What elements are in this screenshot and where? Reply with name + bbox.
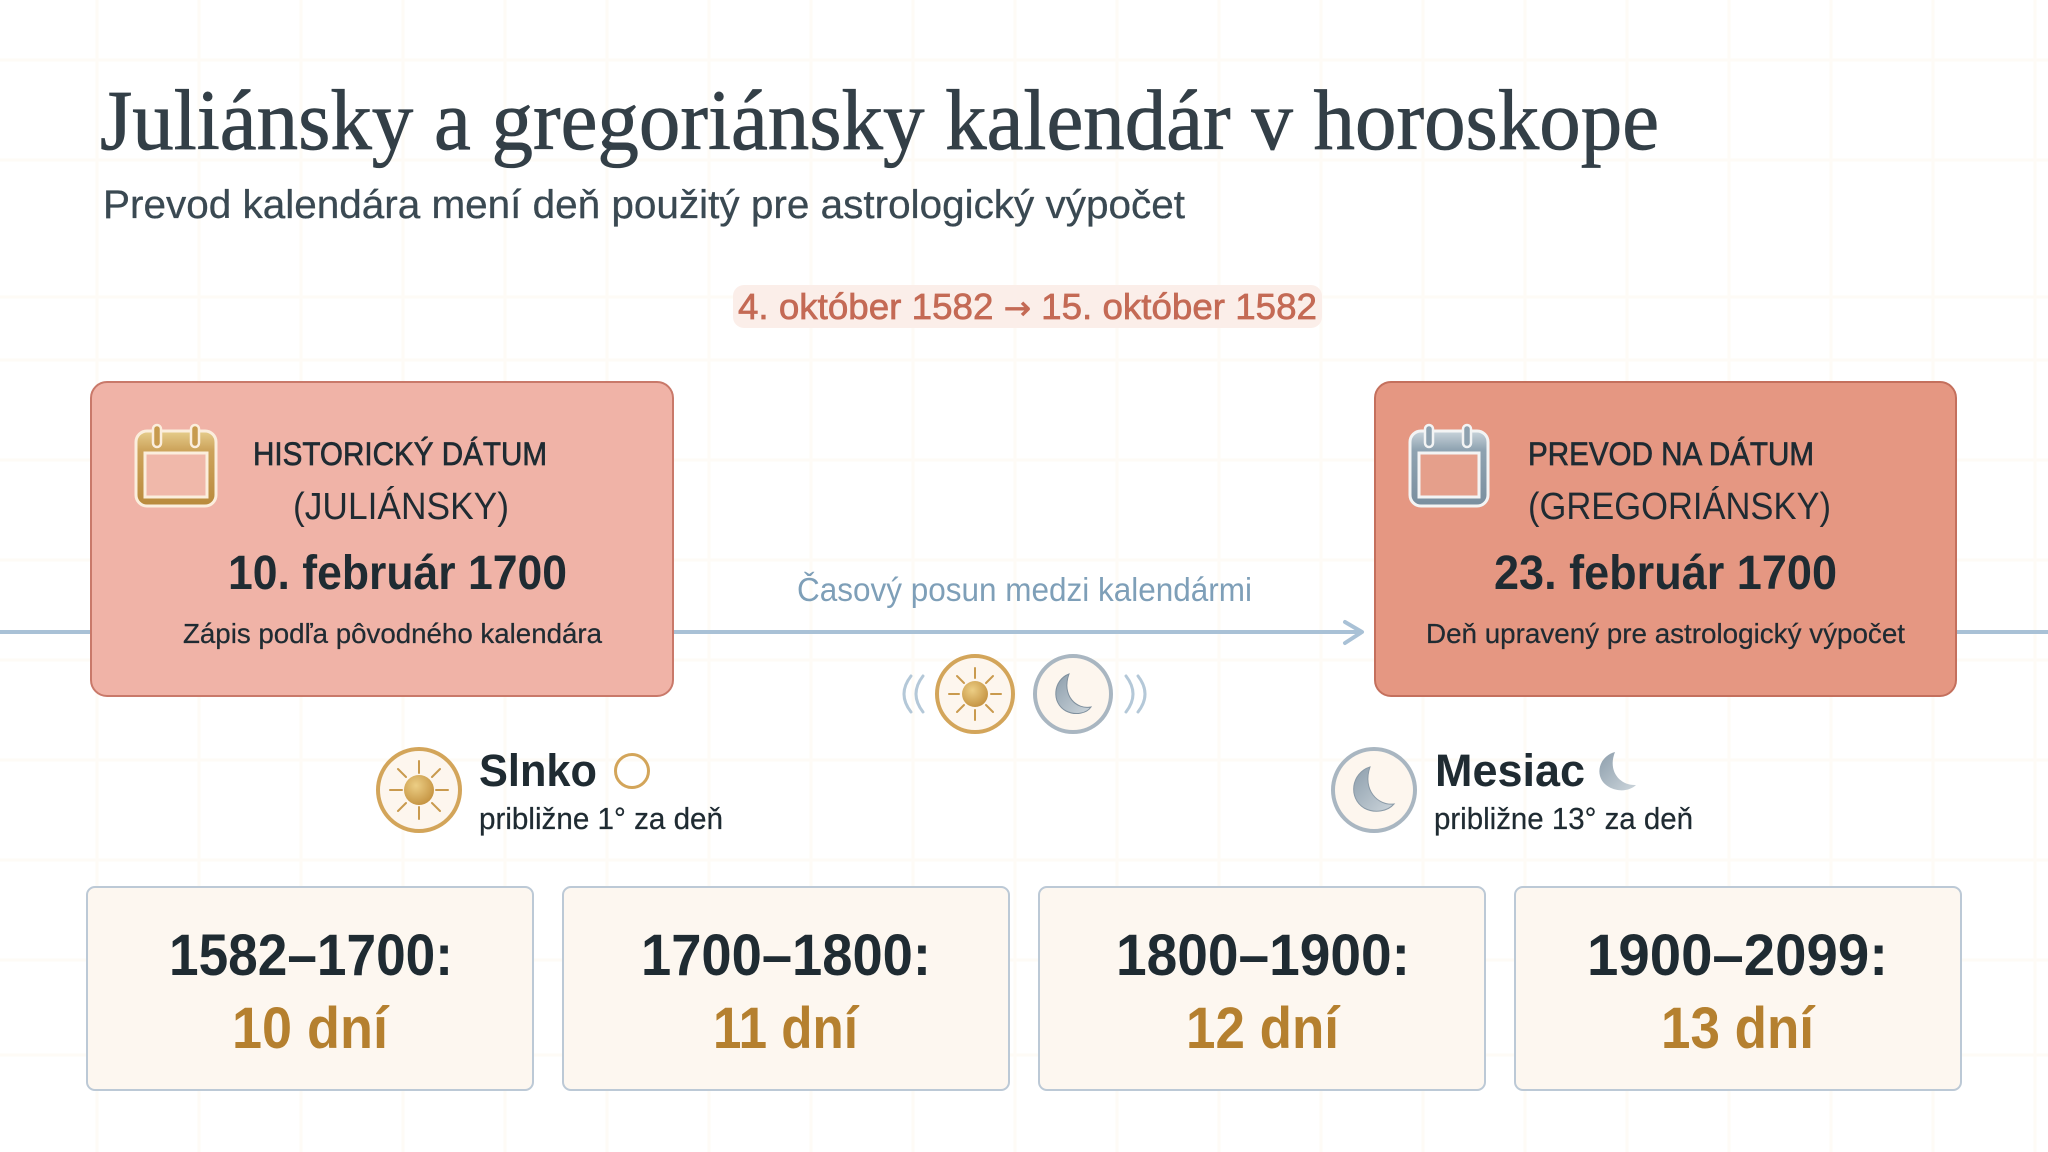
note: Zápis podľa pôvodného kalendára bbox=[183, 618, 602, 649]
moon heading: Mesiac bbox=[1435, 745, 1585, 796]
days: 11 dní bbox=[713, 996, 860, 1061]
title: Juliánsky a gregoriánsky kalendár v horoskope bbox=[100, 72, 1659, 168]
moon badge bbox=[1035, 656, 1111, 732]
sun heading: Slnko bbox=[479, 745, 597, 796]
card label: PREVOD NA DÁTUM bbox=[1528, 436, 1814, 472]
note: Deň upravený pre astrologický výpočet bbox=[1426, 618, 1905, 649]
days: 10 dní bbox=[232, 996, 390, 1061]
days: 12 dní bbox=[1186, 996, 1341, 1061]
icon: steel calendar bbox=[1410, 425, 1488, 506]
panel: converted date bbox=[1375, 382, 1956, 696]
card label: HISTORICKÝ DÁTUM bbox=[253, 436, 547, 472]
panel: 1900–2099 bbox=[1515, 887, 1961, 1090]
timeline label: Časový posun medzi kalendármi bbox=[797, 571, 1252, 608]
icon: small crescent bbox=[1599, 752, 1636, 790]
panel: 1700–1800 bbox=[563, 887, 1009, 1090]
moon legend bbox=[1333, 745, 1693, 836]
panel: 1582–1700 bbox=[87, 887, 533, 1090]
sound arcs right bbox=[1126, 676, 1145, 712]
icon: small ring bbox=[616, 754, 648, 788]
panel: historical date bbox=[91, 382, 673, 696]
icon: gold calendar bbox=[136, 425, 216, 506]
date: 10. február 1700 bbox=[228, 547, 567, 600]
sun rate: približne 1° za deň bbox=[479, 801, 723, 836]
subtitle: Prevod kalendára mení deň použitý pre astrologický výpočet bbox=[103, 183, 1185, 227]
sun badge bbox=[937, 656, 1013, 732]
date jump pill: 4. október 1582 → 15. október 1582 bbox=[738, 286, 1317, 327]
date: 23. február 1700 bbox=[1494, 547, 1837, 600]
sun legend bbox=[378, 745, 723, 836]
period: 1900–2099: bbox=[1587, 923, 1888, 988]
period: 1582–1700: bbox=[169, 923, 453, 988]
icon: central sun and moon bbox=[904, 656, 1145, 732]
icon: sun bbox=[378, 749, 460, 831]
sound arcs left bbox=[904, 676, 923, 712]
icon: moon bbox=[1333, 749, 1415, 831]
calendar name: (GREGORIÁNSKY) bbox=[1528, 485, 1831, 528]
period: 1700–1800: bbox=[641, 923, 931, 988]
period: 1800–1900: bbox=[1116, 923, 1410, 988]
panel: 1800–1900 bbox=[1039, 887, 1485, 1090]
timeline arrow bbox=[0, 622, 2048, 643]
calendar name: (JULIÁNSKY) bbox=[293, 485, 509, 528]
days: 13 dní bbox=[1661, 996, 1816, 1061]
moon rate: približne 13° za deň bbox=[1434, 801, 1693, 836]
